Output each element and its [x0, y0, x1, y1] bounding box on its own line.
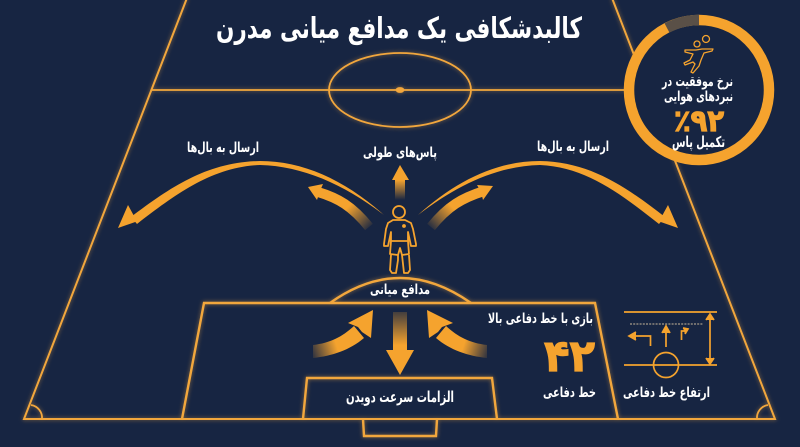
- arrow: centre down: [386, 312, 414, 375]
- label: centre back: مدافع میانی: [370, 282, 430, 298]
- label: recovery pace requirements: الزامات سرعت دویدن: [346, 388, 454, 406]
- label: defensive line: خط دفاعی: [543, 385, 596, 401]
- label: defensive line height: ارتفاع خط دفاعی: [623, 385, 710, 401]
- arrow: lower right inward: [427, 310, 487, 358]
- arrow: small right: [431, 185, 493, 227]
- stat ring: aerial duels: [624, 15, 774, 165]
- label: playing a high line: بازی با خط دفاعی بالا: [488, 311, 593, 327]
- arrow: long pass up: [392, 165, 409, 200]
- label: long passes: پاس‌های طولی: [363, 145, 437, 161]
- arrow: big left cross: [118, 161, 384, 228]
- label: crosses right: ارسال به بال‌ها: [537, 139, 609, 155]
- arrow: big right cross: [418, 161, 678, 228]
- title: کالبدشکافی یک مدافع میانی مدرن: [216, 11, 582, 45]
- label: pass completion: تکمیل پاس: [672, 133, 725, 152]
- diagram: defensive line height: [624, 312, 717, 378]
- icon: centre back player: [384, 206, 416, 273]
- label: aerial duel success rate: نرخ موفقیت در: [661, 74, 733, 90]
- arrow: small left: [308, 184, 369, 227]
- arrow: lower left inward: [313, 310, 373, 358]
- label: crosses left: ارسال به بال‌ها: [187, 140, 259, 156]
- stat: 42: ۴۲: [544, 331, 595, 382]
- label: aerial duels line 2: نبردهای هوایی: [664, 89, 733, 105]
- stat: 92 percent: ٪۹۲: [674, 104, 724, 139]
- icon: jumping player: [684, 36, 713, 73]
